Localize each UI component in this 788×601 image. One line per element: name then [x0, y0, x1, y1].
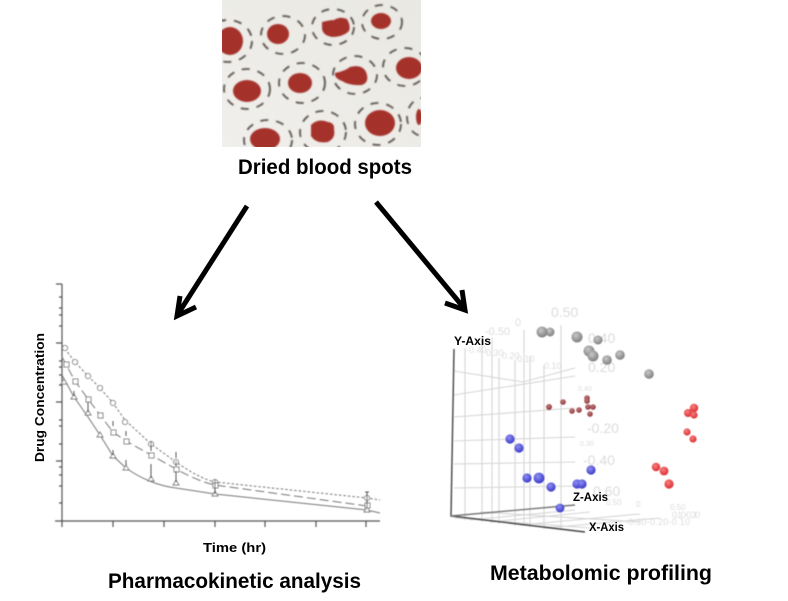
faint tick labels — [466, 304, 700, 527]
faint tick labels: 0.50 — [670, 503, 686, 512]
heading: Pharmacokinetic analysis: Pharmacokinetic analysis — [108, 570, 361, 593]
faint tick labels: -0.50 — [485, 326, 510, 338]
label: Y-Axis: Y-Axis — [454, 334, 491, 348]
chart axes — [55, 284, 380, 527]
faint tick labels: 0.20 — [588, 359, 615, 375]
faint tick labels: 0.20 — [502, 351, 520, 361]
faint tick labels: 0.50 — [551, 304, 578, 320]
faint tick labels: 0.10 — [544, 361, 562, 371]
faint tick labels: 0.10-0.30 — [672, 510, 700, 520]
faint tick labels: 0.10 — [517, 354, 535, 364]
curve: squares, dashed — [62, 357, 370, 508]
x-axis label: Time (hr) — [203, 541, 266, 555]
curve: circles, dotted — [62, 345, 380, 501]
gray points — [536, 326, 654, 379]
faint tick labels: 0.60 — [593, 483, 620, 499]
3D grid — [454, 325, 660, 530]
faint tick labels: -0.20 — [587, 420, 619, 436]
blue points — [505, 434, 596, 512]
heading: Metabolomic profiling: Metabolomic profiling — [490, 562, 712, 585]
error bars — [74, 391, 369, 508]
faint tick labels: 0.50 — [606, 498, 622, 507]
faint tick labels: 0 — [515, 317, 521, 329]
curve: triangles, solid — [61, 375, 380, 513]
axis lines — [451, 349, 585, 532]
faint tick labels: 0.40 — [588, 330, 615, 346]
arrow: to metabolomic profiling — [376, 202, 465, 310]
brown points — [546, 395, 596, 417]
chart: 3D metabolomic scatter plot — [451, 304, 700, 534]
faint tick labels: -0.40 — [466, 345, 487, 355]
y-axis label: Drug Concentration — [33, 333, 47, 462]
faint tick labels: -0.30-0.20-0.10 — [625, 517, 690, 527]
faint tick labels: 0.30 — [580, 441, 594, 448]
faint tick labels: -0.40 — [583, 452, 615, 468]
label: X-Axis: X-Axis — [589, 520, 624, 534]
faint tick labels: 0 — [636, 500, 641, 509]
arrow: to pharmacokinetic analysis — [177, 206, 247, 316]
heading: Dried blood spots: Dried blood spots — [238, 156, 412, 179]
photo: dried blood spots — [222, 0, 421, 147]
label: Z-Axis: Z-Axis — [573, 490, 608, 504]
red points — [652, 404, 698, 489]
faint tick labels: 0.40 — [578, 386, 592, 393]
faint tick labels: 0.30 — [486, 348, 504, 358]
chart: drug concentration over time — [55, 284, 380, 527]
